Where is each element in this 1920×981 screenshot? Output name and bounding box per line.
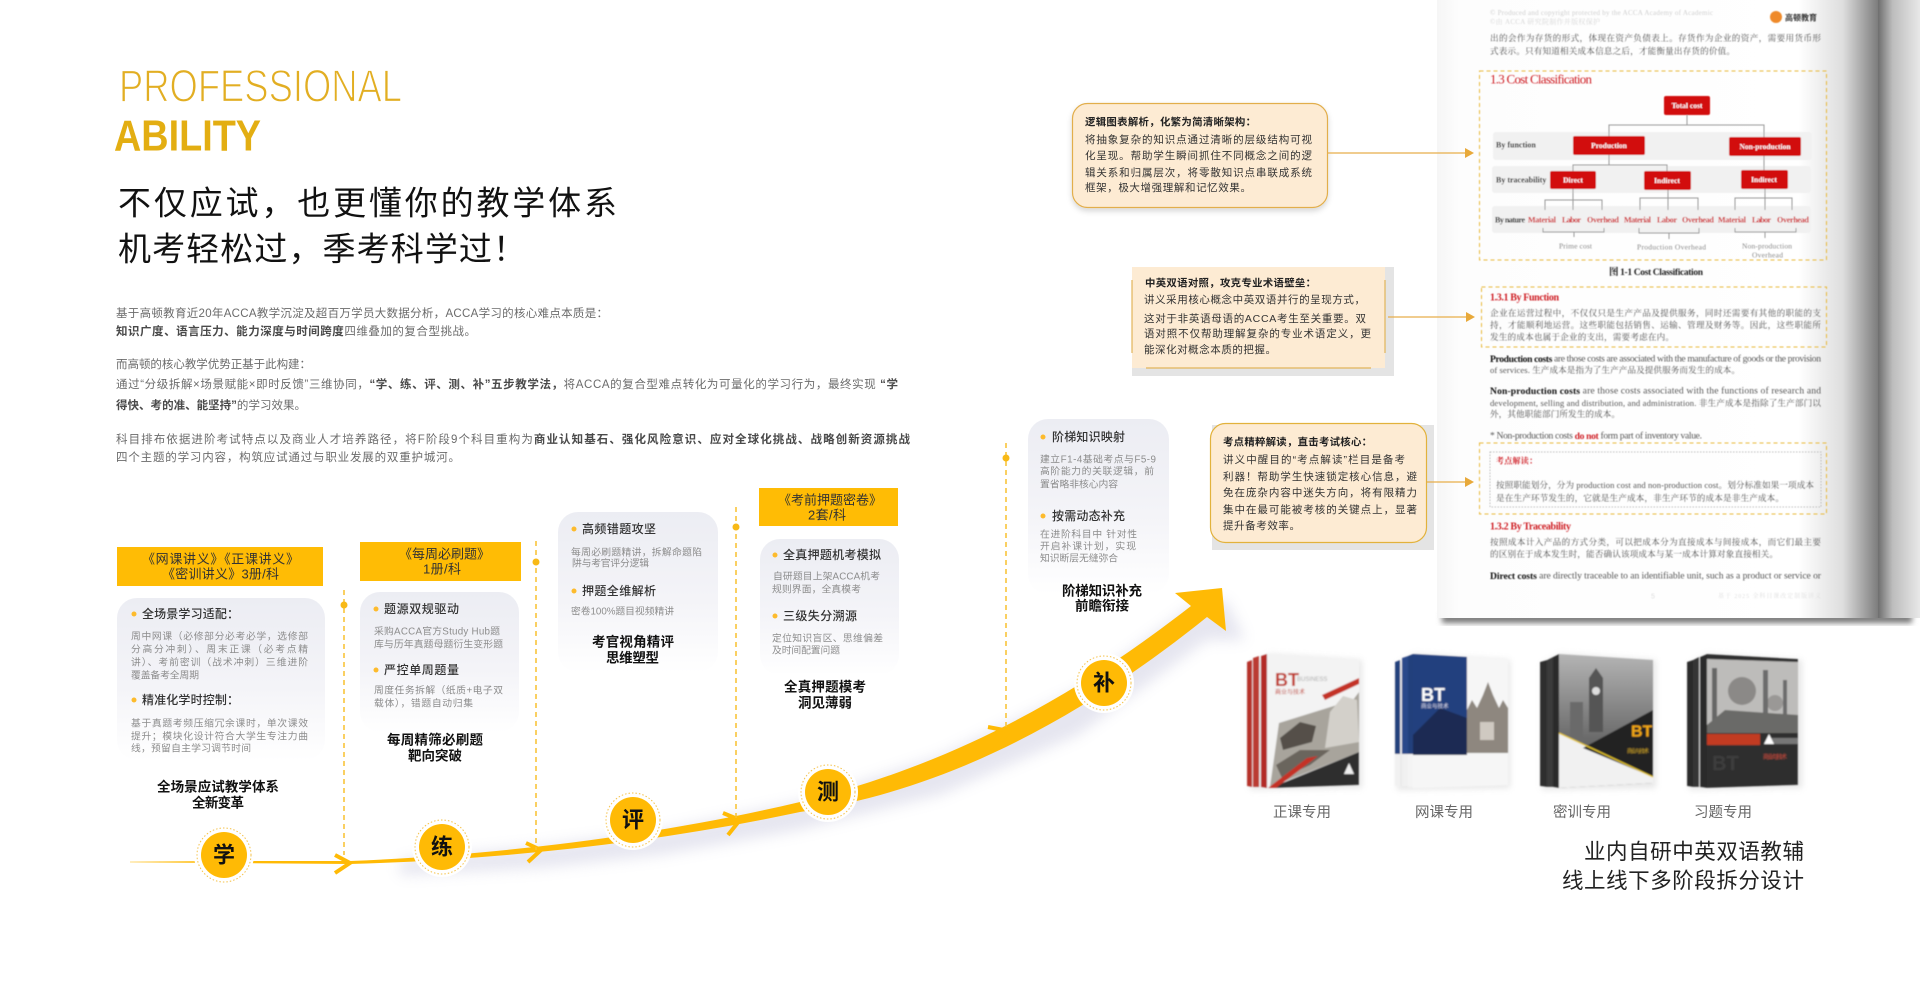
callout: exam key points: 免在庞杂内容中迷失方向，将有限精力	[1223, 486, 1417, 499]
definitions text: development, selling and distribution, and administration. 非生产成本是指除了生产部门以	[1490, 397, 1821, 408]
caption: 前瞻衔接	[1075, 598, 1130, 614]
card: 题源双规驱动	[384, 602, 459, 616]
highlighted exam key point box: 按照职能划分，分为 production cost and non-production cost。划分标准如果一项成本	[1496, 479, 1814, 491]
card: 自研题目上架ACCA机考	[773, 570, 880, 582]
highlighted cost classification diagram: Labor	[1752, 216, 1771, 224]
book: 习题 dark: BT	[1712, 753, 1739, 775]
book: 正课 red: BT	[1275, 670, 1299, 690]
callout: exam key points: 集中在最可能被考核的关键点上，显著	[1223, 503, 1417, 516]
card: 高阶能力的关联逻辑，前	[1040, 464, 1154, 478]
book page shadow	[1442, 614, 1912, 623]
book tag: 《考前押题密卷》	[778, 492, 882, 508]
highlighted cost classification diagram: Indirect	[1751, 175, 1777, 184]
traceability section: 按照成本计入产品的方式分类，可以把成本分为直接成本与间接成本，而它们最主要	[1490, 536, 1821, 548]
highlighted cost classification diagram: Direct	[1563, 176, 1583, 184]
intro text block: 四个主题的学习内容，构筑应试通过与职业发展的双重护城河。	[116, 450, 460, 464]
callout: exam key points	[1210, 424, 1434, 550]
card: 分高分冲刺）、周末正课（必考点精	[131, 642, 308, 656]
card: 提升；模块化设计符合大学生专注力曲	[131, 730, 308, 742]
book tag	[117, 547, 323, 586]
step badge 补	[1074, 653, 1134, 713]
heading: 不仅应试，也更懂你的教学体系	[118, 184, 617, 222]
traceability section: 5	[1651, 594, 1655, 600]
left page of book	[1437, 0, 1878, 618]
card	[360, 592, 519, 732]
callout: bilingual comparison: 能深化对概念本质的把握。	[1144, 343, 1276, 356]
card: 严控单周题量	[384, 662, 459, 677]
book tag: 《每周必刷题》	[399, 546, 490, 562]
traceability section	[1490, 522, 1822, 600]
highlighted cost classification diagram: Material	[1528, 216, 1557, 224]
step badge 练	[412, 817, 472, 877]
title: professional ability: PROFESSIONAL	[119, 60, 402, 112]
tagline	[1562, 840, 1804, 893]
callout: bilingual comparison: 讲义采用核心概念中英双语并行的呈现方式，	[1144, 293, 1365, 306]
highlighted cost classification diagram: Non-production	[1742, 242, 1792, 250]
column: 测	[759, 488, 899, 822]
caption: 考官视角精评	[592, 634, 674, 650]
highlighted cost classification diagram: Non-production	[1739, 142, 1791, 151]
callout: exam key points: 利器！帮助学生快速锁定核心信息，避	[1223, 470, 1418, 483]
caption	[592, 634, 674, 666]
highlighted cost classification diagram: By traceability	[1496, 176, 1546, 184]
title: professional ability: ABILITY	[114, 112, 261, 160]
column: 补	[1028, 419, 1169, 713]
book labels	[1273, 804, 1752, 821]
open textbook page sample	[1437, 0, 1920, 623]
card: 三级失分溯源	[783, 608, 857, 623]
card	[1028, 419, 1169, 594]
step badge 学: 学	[213, 842, 235, 868]
definitions text: Non-production costs are those costs associated with the functions of research and	[1490, 386, 1821, 396]
card: 及时间配置问题	[772, 644, 840, 656]
card: 规则界面，全真模考	[772, 582, 861, 596]
callout: logic diagrams: 辑关系和归属层次，将零散知识点串联成系统	[1085, 166, 1312, 179]
callout: exam key points: 考点精粹解读，直击考试核心：	[1223, 436, 1372, 448]
card: 知识断层无缝弥合	[1040, 552, 1118, 564]
traceability section: 的区别在于成本发生时，能否确认该项成本与某一成本计算对象直接相关。	[1490, 548, 1778, 560]
card: 讲）、考前密训（战术冲刺）三维进阶	[131, 656, 308, 668]
intro text block: 科目排布依据进阶考试特点以及商业人才培养路径，将F阶段9个科目重构为商业认知基石、强化风险意识、应对全球化挑战、战略创新资源挑战	[116, 432, 910, 446]
page header	[1490, 9, 1817, 26]
step badge 练: 练	[431, 834, 453, 860]
caption: 全真押题模考	[784, 678, 866, 694]
definitions text: * Non-production costs do not form part of inventory value.	[1490, 430, 1702, 442]
card: 按需动态补充	[1052, 508, 1125, 523]
card: 全真押题机考模拟	[783, 547, 881, 562]
step badge 学	[194, 825, 254, 885]
book tag: 2套/科	[808, 508, 846, 522]
intro text block: 基于高顿教育近20年ACCA教学沉淀及超百万学员大数据分析，ACCA学习的核心难点本质是：	[116, 306, 608, 320]
highlighted cost classification diagram: By function	[1496, 140, 1536, 150]
card: 采购ACCA官方Study Hub题	[374, 624, 500, 638]
card: 全场景学习适配：	[142, 606, 239, 621]
card: 线，预留自主学习调节时间	[131, 742, 251, 754]
intro paragraph	[1490, 32, 1821, 57]
highlighted cost classification diagram	[1480, 71, 1826, 260]
callout: exam key points: 提升备考效率。	[1223, 519, 1300, 532]
definitions text	[1490, 354, 1821, 442]
card: 在进阶科目中 针对性	[1040, 528, 1137, 540]
card: 押题全维解析	[582, 583, 656, 598]
card	[760, 539, 899, 675]
figure caption: 图 1-1 Cost Classification	[1609, 267, 1704, 278]
card: 高频错题攻坚	[582, 521, 656, 536]
highlighted cost classification diagram: Overhead	[1752, 250, 1783, 260]
tagline: 线上线下多阶段拆分设计	[1562, 869, 1804, 893]
highlighted bilingual section: 发生的成本也属于企业的支出，需要考虑在内。	[1490, 331, 1674, 343]
highlighted cost classification diagram: Labor	[1562, 216, 1581, 224]
card: 周中网课（必修部分必考必学，选修部	[131, 630, 308, 642]
card: 密卷100%题目视频精讲	[571, 604, 674, 618]
step badge 补: 补	[1093, 670, 1115, 696]
book tag: 《网课讲义》《正课讲义》	[142, 552, 299, 566]
highlighted cost classification diagram: By nature	[1495, 216, 1525, 224]
highlighted cost classification diagram: Prime cost	[1559, 242, 1593, 250]
callout: logic diagrams	[1072, 104, 1328, 208]
column: 练	[360, 542, 521, 877]
callout: bilingual comparison: 这对于非英语母语的ACCA考生至关重要。双	[1144, 312, 1366, 325]
card: 阶梯知识映射	[1052, 429, 1125, 444]
page header: ©由 ACCA 研究院制作并版权保护	[1490, 17, 1600, 26]
growth curve arrow	[130, 588, 1245, 875]
caption: 阶梯知识补充	[1062, 582, 1142, 598]
callout: bilingual comparison	[1132, 267, 1394, 376]
highlighted exam key point box: 考点解读：	[1496, 456, 1537, 466]
page header: 高顿教育	[1785, 12, 1817, 22]
highlighted cost classification diagram: Production	[1591, 141, 1628, 150]
callout: bilingual comparison: 语对照不仅帮助理解复杂的专业术语定义，更	[1144, 327, 1372, 340]
card: 开启补课计划，实现	[1040, 540, 1136, 552]
caption: 洞见薄弱	[798, 696, 852, 710]
card	[558, 512, 718, 672]
arrow to exam key point box	[1427, 477, 1474, 487]
caption: 思维塑型	[606, 650, 659, 666]
book labels: 正课专用	[1273, 804, 1331, 821]
book: 习题 dark	[1687, 654, 1802, 790]
highlighted cost classification diagram: 1.3 Cost Classification	[1490, 72, 1592, 86]
card: 建立F1-4基础考点与F5-9	[1040, 452, 1156, 466]
intro text block: 而高顿的核心教学优势正基于此构建：	[116, 357, 311, 371]
highlighted cost classification diagram: Labor	[1657, 216, 1677, 224]
highlighted bilingual section: 企业在运营过程中，不仅仅只是生产产品及提供服务，同时还需要有其他的职能的支	[1490, 307, 1821, 319]
caption: 靶向突破	[408, 748, 462, 764]
book: 正课 red	[1247, 654, 1362, 790]
highlighted exam key point box	[1480, 443, 1826, 514]
page content	[1480, 9, 1826, 600]
tagline: 业内自研中英双语教辅	[1584, 840, 1804, 864]
highlighted cost classification diagram: Overhead	[1587, 216, 1620, 224]
highlighted cost classification diagram: Overhead	[1682, 216, 1715, 224]
callout: logic diagrams: 将抽象复杂的知识点通过清晰的层级结构可视	[1085, 133, 1312, 146]
book tag	[759, 488, 898, 526]
book: 正课 red: 商业与技术	[1275, 688, 1305, 696]
step badge 测	[798, 762, 858, 822]
book labels: 网课专用	[1415, 804, 1473, 821]
caption: 每周精筛必刷题	[387, 732, 484, 748]
caption: 全新变革	[192, 794, 244, 810]
callout: logic diagrams: 框架，极大增强理解和记忆效果。	[1085, 181, 1251, 194]
step badge 测: 测	[817, 780, 839, 804]
callout: exam key points: 讲义中醒目的“考点解读”栏目是备考	[1223, 453, 1405, 466]
dashed milestone markers	[340, 443, 1010, 855]
card: 阱与考官评分逻辑	[572, 556, 649, 570]
intro paragraph: 式表示。只有知道相关成本信息之后，才能衡量出存货的价值。	[1490, 45, 1735, 57]
caption	[784, 678, 866, 710]
book labels: 习题专用	[1694, 804, 1752, 821]
intro text block	[116, 306, 910, 464]
traceability section: Direct costs are directly traceable to an identifiable unit, such as a product or service or	[1490, 570, 1822, 582]
caption	[387, 732, 484, 764]
book: 网课 blue: BT	[1421, 685, 1445, 705]
card: 每周必刷题精讲，拆解命题陷	[571, 546, 702, 558]
card: 置省略非核心内容	[1040, 478, 1118, 490]
caption: 全场景应试教学体系	[157, 778, 279, 794]
callout: bilingual comparison: 中英双语对照，攻克专业术语壁垒：	[1145, 276, 1316, 290]
title: professional ability	[114, 60, 402, 160]
highlighted cost classification diagram: Indirect	[1654, 176, 1680, 185]
card: 基于真题考频压缩冗余课时，单次课效	[131, 716, 308, 730]
book: 正课 red: BUSINESS	[1297, 677, 1327, 683]
caption	[1062, 582, 1142, 614]
page header: © Produced and copyright protected by the ACCA Academy of Academic	[1490, 9, 1713, 17]
highlighted cost classification diagram: Material	[1624, 216, 1652, 224]
highlighted exam key point box: 是在生产环节发生的，它就是生产成本，非生产环节的成本是非生产成本。	[1496, 492, 1784, 504]
curve body	[130, 588, 1226, 864]
heading	[118, 184, 617, 268]
arrow to diagram	[1327, 148, 1474, 158]
book labels: 密训专用	[1553, 804, 1611, 821]
book: 密训 black: BT	[1631, 724, 1653, 740]
definitions text: Production costs are those costs are associated with the manufacture of goods or the provision	[1490, 354, 1821, 364]
highlighted bilingual section: 持，才能顺利地运营。这些职能包括销售、运输、管理及财务等。因此，这些职能所	[1490, 319, 1821, 331]
card: 覆盖备考全周期	[131, 668, 199, 682]
definitions text: of services. 生产成本是指为了生产产品及提供服务而发生的成本。	[1490, 364, 1740, 375]
intro text block: 得快、考的准、能坚持”的学习效果。	[116, 398, 306, 412]
caption	[157, 778, 279, 810]
book: 习题 dark: 商业与技术	[1763, 753, 1787, 761]
book tag	[360, 542, 521, 581]
callout: logic diagrams: 逻辑图表解析，化繁为简清晰架构：	[1085, 116, 1256, 128]
traceability section: 1.3.2 By Traceability	[1490, 522, 1571, 532]
step chevrons	[335, 727, 1009, 873]
heading: 机考轻松过，季考科学过！	[118, 230, 526, 268]
card: 定位知识盲区、思维偏差	[772, 632, 883, 644]
textbook set	[1247, 654, 1802, 821]
book tag: 《密训讲义》3册/科	[162, 566, 279, 582]
arrow to bilingual text	[1388, 312, 1475, 322]
book: 网课 blue: 商业与技术	[1421, 702, 1449, 710]
intro text block: 通过“分级拆解×场景赋能×即时反馈”三维协同，“学、练、评、测、补”五步教学法，将ACCA的复合型难点转化为可量化的学习行为，最终实现 “学	[116, 377, 898, 391]
step badge 评: 评	[622, 808, 644, 832]
card: 周度任务拆解（纸质+电子双	[374, 684, 503, 696]
highlighted cost classification diagram: Material	[1718, 216, 1747, 224]
intro paragraph: 出的会作为存货的形式，体现在资产负债表上。存货作为企业的资产，需要用货币形	[1490, 32, 1821, 44]
right page of book	[1878, 0, 1920, 618]
intro text block: 知识广度、语言压力、能力深度与时间跨度四维叠加的复合型挑战。	[116, 324, 476, 338]
book: 密训 black	[1540, 654, 1656, 790]
column: 学	[117, 547, 325, 885]
column: 评	[558, 512, 718, 850]
card: 载体），错题自动归集	[374, 696, 473, 710]
highlighted bilingual section: 1.3.1 By Function	[1490, 292, 1559, 304]
card: 精准化学时控制：	[142, 692, 239, 707]
book tag: 1册/科	[423, 562, 461, 576]
highlighted cost classification diagram: Overhead	[1777, 216, 1810, 224]
highlighted bilingual section	[1482, 287, 1826, 347]
card	[117, 598, 325, 760]
highlighted cost classification diagram: Total cost	[1672, 101, 1703, 110]
curve shadow	[400, 600, 1245, 875]
highlighted cost classification diagram: Production Overhead	[1637, 242, 1706, 252]
book: 网课 blue	[1395, 654, 1510, 790]
step badge 评	[603, 790, 663, 850]
traceability section: 基于 2025 全科目课改定制版讲义	[1718, 592, 1821, 600]
book: 密训 black: 商业与技术	[1627, 747, 1649, 755]
definitions text: 外，其他职能部门所发生的成本。	[1490, 408, 1620, 420]
card: 库与历年真题母题衍生变形题	[374, 638, 503, 650]
callout: logic diagrams: 化呈现。帮助学生瞬间抓住不同概念之间的逻	[1085, 149, 1312, 162]
